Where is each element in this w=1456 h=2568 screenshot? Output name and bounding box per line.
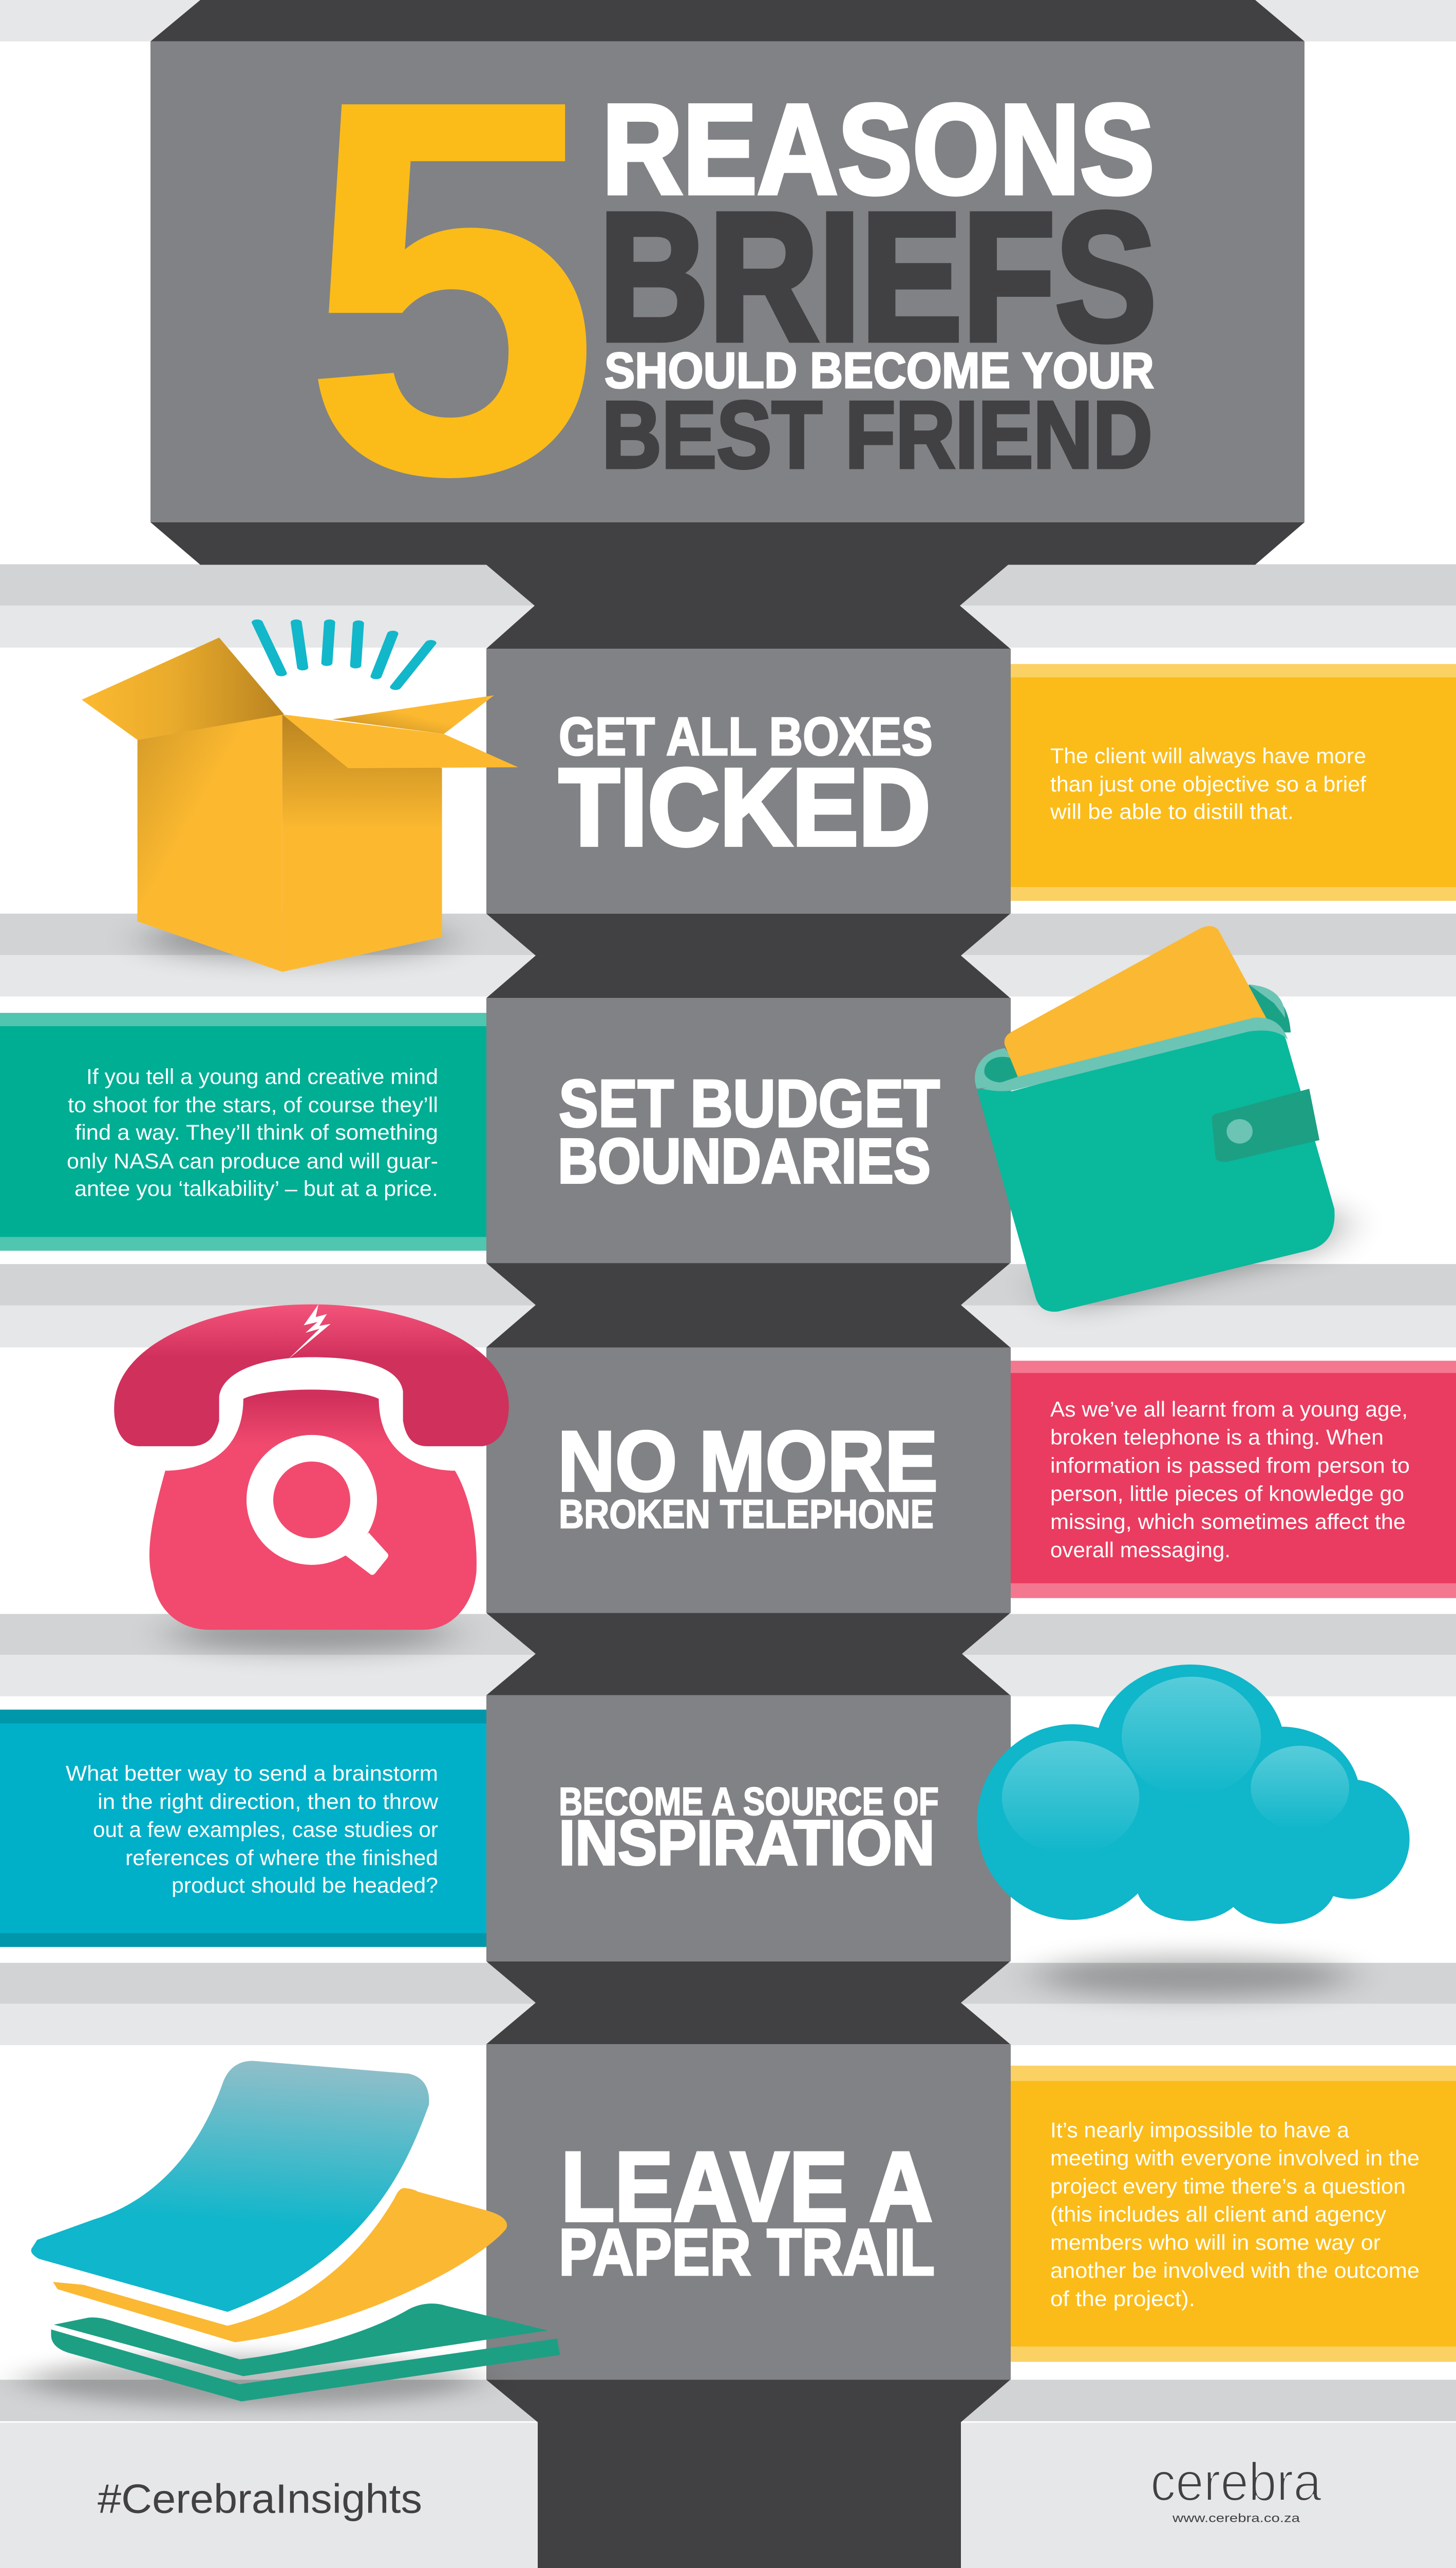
section 2 description panel: only NASA can produce and will guar- <box>67 1149 438 1173</box>
section 2 description panel <box>0 1013 486 1251</box>
section 3 heading box: BROKEN TELEPHONE <box>559 1491 934 1537</box>
title text <box>599 78 1157 488</box>
big number 5: 5 <box>303 0 600 584</box>
section 3 description panel: As we’ve all learnt from a young age, <box>1050 1397 1408 1421</box>
section 4 description panel: What better way to send a brainstorm <box>66 1761 438 1785</box>
section 5 description panel: It’s nearly impossible to have a <box>1050 2118 1350 2142</box>
icon: open box <box>82 622 518 972</box>
section 4 description panel: in the right direction, then to throw <box>98 1789 439 1814</box>
section 2 heading box: BOUNDARIES <box>558 1126 931 1197</box>
section 1 description panel <box>1011 664 1456 901</box>
section 1 description panel: The client will always have more <box>1050 744 1366 768</box>
footer hashtag: #CerebraInsights <box>98 2476 422 2521</box>
icon: stack of papers <box>23 2061 560 2406</box>
central dark column connectors <box>150 0 1304 2568</box>
section 3 description panel: information is passed from person to <box>1050 1453 1410 1478</box>
section 2 description panel: find a way. They’ll think of something <box>75 1120 438 1144</box>
section 2 description panel: If you tell a young and creative mind <box>86 1065 438 1089</box>
icon: wallet <box>975 926 1347 1312</box>
section 1 heading box: TICKED <box>559 746 931 868</box>
icon: magnifying glass <box>260 1448 388 1575</box>
section 5 heading box: PAPER TRAIL <box>559 2216 935 2289</box>
section 1 description panel: than just one objective so a brief <box>1050 772 1366 796</box>
section 1 heading box: GET ALL BOXES <box>559 707 933 767</box>
icon: telephone <box>114 1305 509 1652</box>
section 4 heading box: BECOME A SOURCE OF <box>559 1780 939 1824</box>
title text: BRIEFS <box>599 175 1157 379</box>
section 1 heading box <box>486 649 1011 914</box>
section 2 heading box: SET BUDGET <box>559 1066 940 1141</box>
section 4 description panel: references of where the finished <box>125 1846 438 1870</box>
title text: BEST FRIEND <box>602 382 1152 488</box>
section 4 description panel: out a few examples, case studies or <box>93 1818 438 1842</box>
section 3 heading box: NO MORE <box>558 1414 938 1509</box>
section 2 description panel: antee you ‘talkability’ – but at a price. <box>74 1177 438 1201</box>
section 5 description panel: another be involved with the outcome <box>1050 2258 1420 2282</box>
title text: REASONS <box>602 78 1155 220</box>
footer logo: cerebra <box>1150 2452 1321 2512</box>
section 3 heading box <box>486 1348 1011 1613</box>
title text: SHOULD BECOME YOUR <box>604 342 1154 399</box>
section 5 description panel: of the project). <box>1050 2287 1195 2311</box>
section 5 heading box <box>486 2044 1011 2380</box>
section 3 description panel: missing, which sometimes affect the <box>1050 1509 1406 1534</box>
section 4 description panel: product should be headed? <box>172 1873 438 1897</box>
section 2 description panel: to shoot for the stars, of course they’ll <box>68 1092 438 1117</box>
section 2 heading box <box>486 998 1011 1263</box>
section 3 description panel: broken telephone is a thing. When <box>1050 1425 1384 1449</box>
section 4 heading box: INSPIRATION <box>559 1808 935 1878</box>
section 3 description panel <box>1011 1361 1456 1598</box>
section 5 heading box: LEAVE A <box>561 2131 933 2242</box>
section 5 description panel: (this includes all client and agency <box>1050 2202 1386 2226</box>
section 3 description panel: overall messaging. <box>1050 1538 1231 1562</box>
section 4 heading box <box>486 1695 1011 1961</box>
section 5 description panel: meeting with everyone involved in the <box>1050 2146 1420 2170</box>
title panel <box>150 0 1304 584</box>
section 5 description panel: project every time there’s a question <box>1050 2174 1406 2198</box>
section 5 description panel <box>1011 2066 1456 2362</box>
section 5 description panel: members who will in some way or <box>1050 2231 1381 2254</box>
section 1 description panel: will be able to distill that. <box>1050 800 1294 824</box>
section 4 description panel <box>0 1710 486 1947</box>
icon: cloud <box>977 1665 1410 1997</box>
section 3 description panel: person, little pieces of knowledge go <box>1050 1481 1404 1505</box>
footer logo: www.cerebra.co.za <box>1172 2511 1300 2524</box>
